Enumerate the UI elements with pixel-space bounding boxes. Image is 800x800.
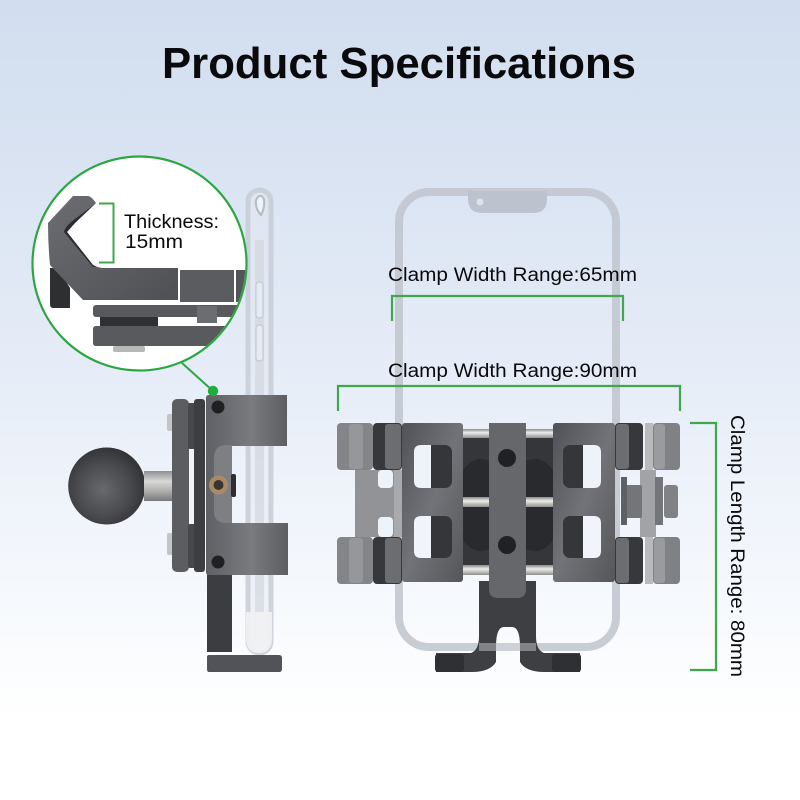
zoom circle callout bbox=[32, 156, 253, 370]
right windows bbox=[563, 445, 601, 558]
thumb knob bbox=[231, 474, 236, 497]
right main plate bbox=[553, 423, 615, 582]
thickness label bbox=[124, 212, 219, 253]
ghost right wing bbox=[640, 470, 656, 537]
light strips bbox=[645, 423, 653, 584]
rear screws bbox=[167, 414, 173, 555]
dark backing bbox=[463, 437, 553, 565]
circle ring bbox=[32, 156, 246, 370]
thickness label: Thickness: bbox=[124, 212, 219, 233]
inner dark pads bbox=[373, 423, 643, 584]
foot bbox=[207, 655, 282, 672]
front bracket bbox=[206, 395, 288, 575]
left pad highlights bbox=[349, 424, 363, 583]
ghost right pads bbox=[653, 423, 680, 584]
left main plate bbox=[402, 423, 463, 582]
center bar bbox=[489, 423, 526, 598]
65mm label: Clamp Width Range:65mm bbox=[388, 265, 637, 286]
front view mount bbox=[337, 423, 680, 672]
adjustment knob bbox=[621, 477, 678, 525]
ghost wing cutouts bbox=[378, 470, 393, 537]
90mm label: Clamp Width Range:90mm bbox=[388, 361, 637, 382]
knurled knob bbox=[50, 268, 70, 308]
arm end bbox=[236, 270, 246, 302]
phone notch bbox=[468, 191, 547, 213]
lower plate bbox=[93, 326, 226, 346]
top rod bbox=[463, 429, 553, 438]
80mm length label: Clamp Length Range: 80mm bbox=[726, 415, 747, 677]
left windows bbox=[414, 445, 452, 558]
bracket web bbox=[214, 445, 232, 523]
magnified clamp bbox=[48, 196, 253, 352]
brass screw bbox=[209, 476, 228, 494]
hook arm bbox=[48, 196, 178, 300]
rear gap bbox=[189, 449, 194, 524]
side view phone outline bbox=[246, 190, 272, 653]
thickness label: 15mm bbox=[125, 232, 183, 253]
lower bracket bbox=[436, 581, 580, 672]
ball stem bbox=[144, 471, 173, 501]
pad highlights bbox=[385, 424, 629, 583]
spacers bbox=[188, 403, 195, 568]
leg bbox=[207, 572, 232, 652]
spacer bbox=[100, 317, 158, 326]
arm segment bbox=[180, 270, 234, 302]
65mm bracket bbox=[392, 296, 623, 321]
cross knob shape bbox=[463, 459, 553, 551]
threaded rod bbox=[463, 497, 553, 507]
zoom leader line bbox=[182, 363, 218, 396]
phone edge through bracket bbox=[479, 643, 536, 651]
bolt holes bbox=[212, 400, 224, 568]
side view mount bbox=[68, 395, 288, 672]
front view phone outline bbox=[399, 191, 616, 647]
bottom screw bbox=[113, 346, 145, 352]
ghost left wing bbox=[355, 470, 403, 537]
thickness bracket bbox=[99, 204, 114, 262]
camera dot bbox=[476, 198, 484, 206]
bottom rod bbox=[463, 565, 553, 575]
middle plate bbox=[194, 399, 205, 572]
upper plate bbox=[93, 305, 253, 317]
90mm bracket bbox=[338, 386, 680, 411]
bracket feet bbox=[435, 654, 581, 672]
ball head bbox=[68, 448, 145, 524]
middle screw bbox=[197, 306, 217, 323]
rear plate bbox=[172, 399, 189, 572]
right pad highlights bbox=[654, 424, 665, 583]
title: Product Specifications bbox=[162, 39, 636, 88]
center holes bbox=[498, 449, 516, 554]
80mm length bracket bbox=[690, 423, 716, 670]
ghost left phone strip bbox=[394, 470, 403, 537]
ghost left pads bbox=[337, 423, 373, 584]
inner hook shadow bbox=[64, 203, 97, 267]
